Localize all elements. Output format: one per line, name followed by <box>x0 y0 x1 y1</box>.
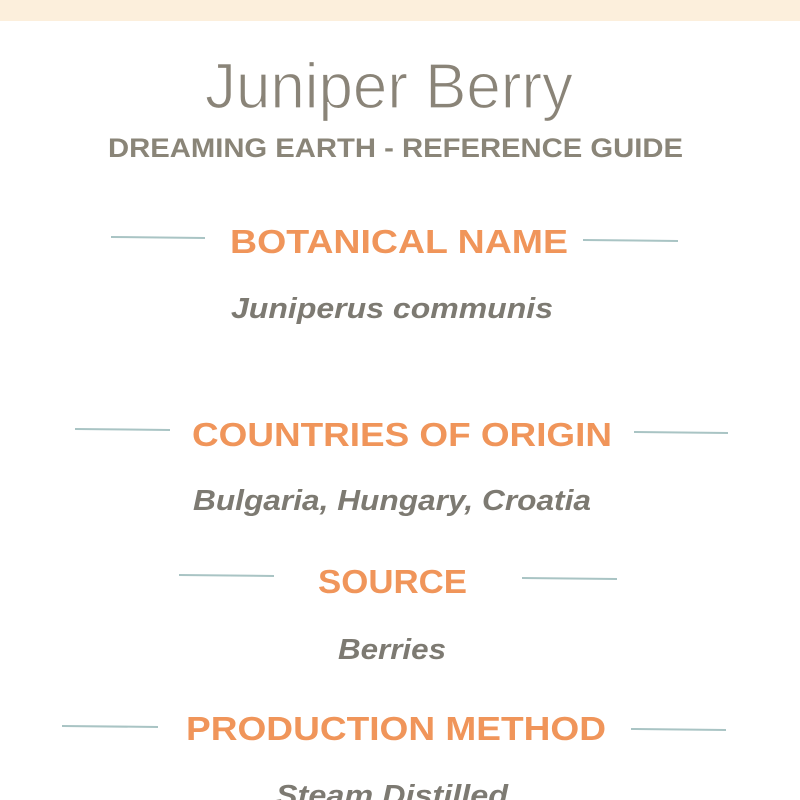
subtitle: DREAMING EARTH - REFERENCE GUIDE <box>108 133 683 163</box>
section: source: Berries <box>338 634 446 666</box>
section: countries of origin <box>75 416 728 517</box>
section: botanical name: Juniperus communis <box>231 293 553 325</box>
section: botanical name <box>111 223 678 325</box>
section: countries of origin: COUNTRIES OF ORIGIN <box>192 416 612 453</box>
section: source <box>179 563 617 666</box>
title: Juniper Berry <box>205 50 573 122</box>
section: production method: PRODUCTION METHOD <box>186 710 606 747</box>
section: source: SOURCE <box>318 563 467 600</box>
section: countries of origin: Bulgaria, Hungary, Croatia <box>193 485 591 517</box>
section: production method <box>62 710 726 800</box>
section: botanical name: BOTANICAL NAME <box>230 223 568 260</box>
top band <box>0 0 800 21</box>
